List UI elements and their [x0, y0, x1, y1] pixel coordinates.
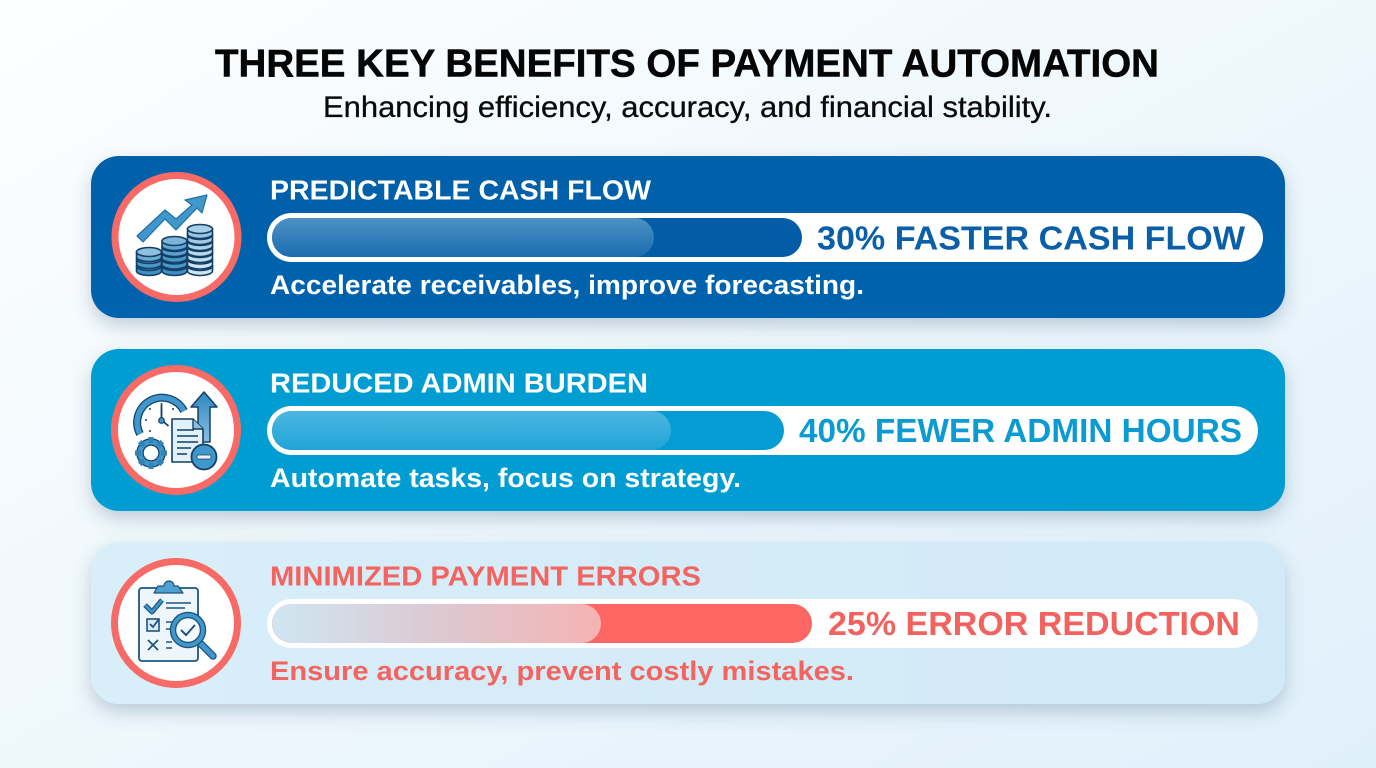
arrow [191, 392, 217, 442]
panel background [91, 542, 1285, 704]
heading: REDUCED ADMIN BURDEN [270, 368, 648, 398]
title: THREE KEY BENEFITS OF PAYMENT AUTOMATION [215, 42, 1159, 86]
panel background [91, 156, 1285, 318]
icon: clipboard with magnifier [114, 562, 238, 684]
value label: 40% FEWER ADMIN HOURS [799, 412, 1242, 449]
progress bar: 25% [267, 599, 1258, 648]
description: Ensure accuracy, prevent costly mistakes. [270, 656, 854, 686]
progress bar: 30% [267, 213, 1263, 262]
icon: coins with rising arrow [115, 176, 238, 298]
description: Automate tasks, focus on strategy. [270, 463, 741, 493]
subtitle: Enhancing efficiency, accuracy, and financial stability. [323, 91, 1052, 124]
value label: 30% FASTER CASH FLOW [817, 220, 1246, 256]
value label: 25% ERROR REDUCTION [828, 605, 1240, 642]
document [172, 419, 203, 462]
panel: reduced admin burden [91, 349, 1285, 511]
clock [137, 398, 184, 434]
progress bar: 40% [267, 406, 1258, 455]
panel background [91, 349, 1285, 511]
heading: PREDICTABLE CASH FLOW [270, 174, 652, 206]
heading: MINIMIZED PAYMENT ERRORS [270, 560, 701, 592]
gear [140, 442, 162, 464]
panel: minimized payment errors [91, 542, 1285, 704]
icon: clock, gear, document, arrow [114, 368, 238, 492]
description: Accelerate receivables, improve forecasting. [270, 270, 864, 300]
minus badge [192, 444, 216, 470]
panel: predictable cash flow [91, 156, 1285, 318]
